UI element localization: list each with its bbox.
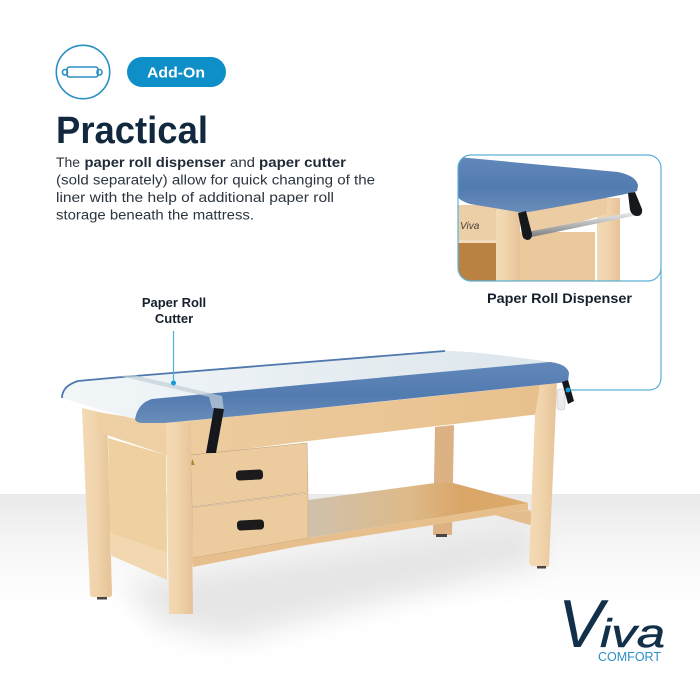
inset frame <box>458 155 661 281</box>
description text <box>56 155 375 224</box>
front left leg <box>166 423 193 614</box>
description text: and <box>230 155 255 171</box>
floor backdrop <box>0 494 700 700</box>
inset: viva mark: Viva <box>460 221 480 232</box>
cutter leader line with dot <box>171 331 176 386</box>
lower drawer <box>192 493 308 558</box>
mattress front band <box>135 362 569 423</box>
front left rear leg <box>82 408 112 597</box>
inset: rear panel and leg <box>458 198 620 281</box>
back right leg <box>433 425 454 535</box>
mattress back edge <box>62 351 445 398</box>
paper cutter strip <box>120 375 224 410</box>
mattress top <box>62 351 557 419</box>
viva comfort logo <box>558 586 665 664</box>
cutter black strap <box>206 408 224 453</box>
warning label <box>190 459 194 465</box>
side panel <box>108 438 167 553</box>
inset: chrome rod <box>531 212 634 237</box>
front right leg <box>529 382 557 567</box>
description text: storage beneath the mattress. <box>56 208 254 224</box>
cutter label: Cutter <box>155 311 193 326</box>
inset: paper roll dispenser close-up <box>458 155 661 390</box>
table shadow on floor <box>125 525 545 640</box>
title: Practical <box>56 110 208 152</box>
inset caption: Paper Roll Dispenser <box>487 290 633 306</box>
right leg foot <box>537 566 546 568</box>
description text: paper roll dispenser <box>84 155 226 171</box>
dispenser black bracket <box>562 380 574 404</box>
icon: paper roll in circle <box>56 45 110 99</box>
description text: liner with the help of additional paper roll <box>56 190 334 206</box>
inset: right black bracket <box>628 192 642 216</box>
dispenser leader line <box>568 268 661 390</box>
description text: (sold separately) allow for quick changing of the <box>56 172 375 188</box>
paper roll on dispenser <box>557 389 565 410</box>
lower shelf <box>192 483 536 567</box>
exam table <box>62 351 574 614</box>
cutter label: Paper Roll <box>142 295 206 310</box>
back right foot <box>436 534 447 537</box>
viva comfort logo: iva <box>600 612 665 656</box>
viva comfort logo: COMFORT <box>598 650 661 664</box>
viva comfort logo: V <box>558 586 609 662</box>
description text: The <box>56 155 80 171</box>
lower drawer handle <box>237 519 264 531</box>
inset: left black bracket <box>518 211 532 240</box>
dispenser leader dot <box>566 388 570 392</box>
lower side rail <box>110 533 167 580</box>
add-on badge: Add-On <box>147 64 205 82</box>
description text: paper cutter <box>259 155 347 171</box>
upper drawer handle <box>236 469 263 481</box>
rear leg foot <box>97 597 107 600</box>
cutter label <box>142 295 206 326</box>
apron <box>97 385 540 456</box>
inset: mattress <box>458 157 638 212</box>
upper drawer <box>190 443 308 507</box>
add-on badge <box>127 57 226 87</box>
